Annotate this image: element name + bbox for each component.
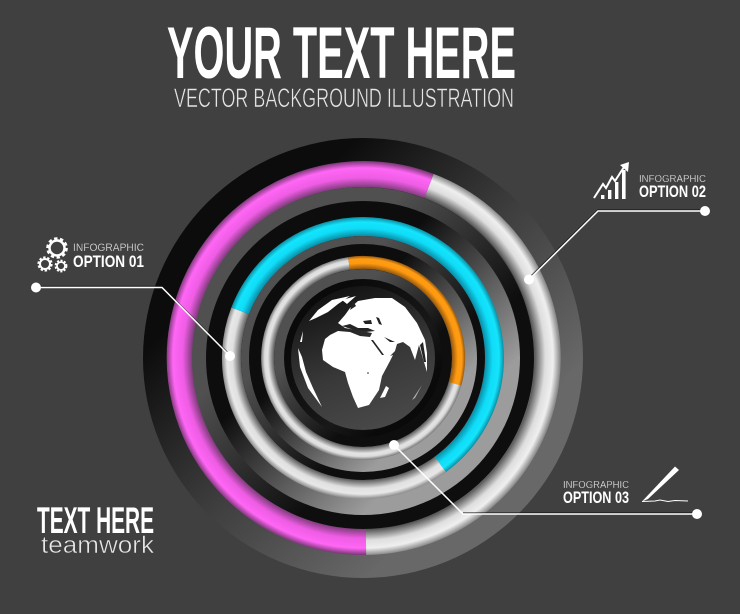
label: option 03 — [563, 479, 629, 507]
text block: teamwork — [37, 500, 155, 559]
icon: gears — [38, 238, 67, 272]
label: option 02: INFOGRAPHIC — [639, 173, 706, 185]
subtitle: VECTOR BACKGROUND ILLUSTRATION — [174, 83, 514, 113]
label: option 03: OPTION 03 — [563, 489, 629, 507]
ring: middle cyan segment — [231, 227, 494, 490]
label: option 02 — [639, 173, 706, 201]
text block: teamwork: TEXT HERE — [37, 500, 154, 541]
connector: option 02 — [524, 206, 710, 284]
concentric ring chart — [143, 138, 583, 578]
icon: globe — [298, 296, 427, 408]
connector: option 01 — [31, 282, 235, 361]
connector: option 03 — [389, 440, 702, 519]
text block: teamwork: teamwork — [41, 532, 155, 559]
label: option 01 — [73, 242, 144, 271]
label: option 01: OPTION 01 — [73, 253, 144, 271]
ring: outer pink segment — [180, 174, 548, 542]
icon: rising chart — [594, 162, 629, 199]
ring: inner orange segment — [268, 262, 459, 453]
label: option 02: OPTION 02 — [639, 183, 706, 201]
label: option 01: INFOGRAPHIC — [73, 242, 144, 254]
icon: pen — [642, 466, 688, 502]
label: option 03: INFOGRAPHIC — [563, 479, 629, 491]
